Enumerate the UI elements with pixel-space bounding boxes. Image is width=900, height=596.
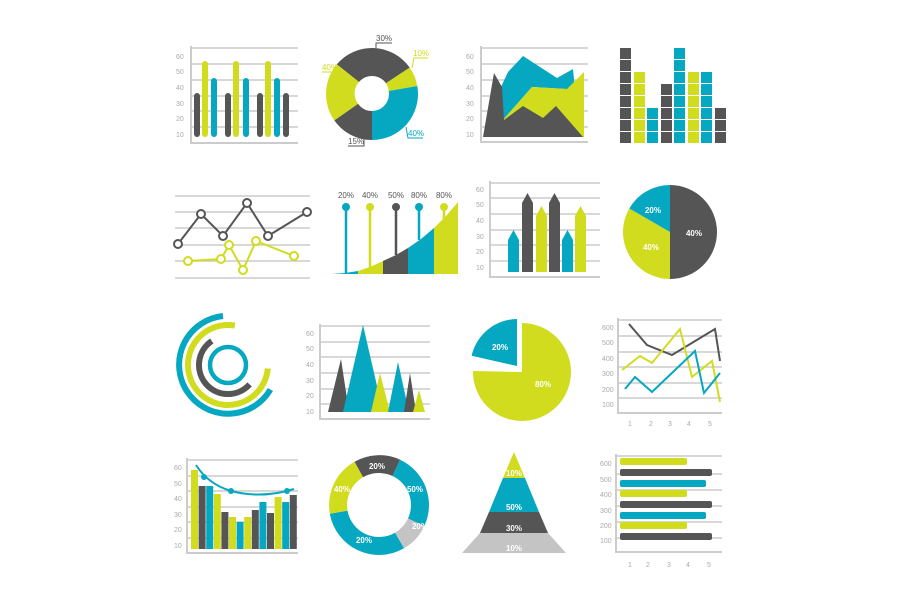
chart: horizontal bars: 3 [667,562,671,569]
chart: mountain peaks: 10 [306,409,314,416]
chart: multi-line chart: 600 [602,325,614,332]
chart: donut with inner labels [329,455,429,555]
chart: arrow bars [476,181,600,277]
chart: multi-line chart: 100 [602,402,614,409]
chart: area chart: 30 [466,101,474,108]
chart: horizontal bars: 100 [600,538,612,545]
chart: multi-line chart: 4 [687,421,691,428]
chart: line chart with circle markers [174,196,311,278]
chart: bars with trend curve: 20 [174,527,182,534]
chart: mountain peaks: 40 [306,362,314,369]
chart: mountain peaks: 20 [306,393,314,400]
chart: multi-line chart: 400 [602,356,614,363]
chart: arrow bars: 30 [476,234,484,241]
chart: growth curve with pins: 40% [362,191,378,200]
chart: arrow bars: 20 [476,249,484,256]
chart: bars with trend curve: 40 [174,496,182,503]
chart: horizontal bars: 400 [600,492,612,499]
chart: donut with inner labels: 20% [412,522,428,531]
chart: donut with callouts: 10% [413,49,429,58]
chart: bars with trend curve: 30 [174,512,182,519]
chart: donut with inner labels: 50% [407,485,423,494]
chart: bars with trend curve [174,458,298,553]
chart: multi-line chart: 3 [668,421,672,428]
chart: area chart: 40 [466,85,474,92]
chart: horizontal bars: 300 [600,508,612,515]
chart: donut with callouts: 30% [376,34,392,43]
chart: horizontal bars: 200 [600,523,612,530]
chart: area chart: 20 [466,116,474,123]
chart: mountain peaks: 50 [306,346,314,353]
chart: mountain peaks: 60 [306,331,314,338]
chart: multi-line chart: 5 [708,421,712,428]
chart: horizontal bars: 4 [686,562,690,569]
chart: pyramid: 10% [506,469,522,478]
chart: multi-line chart: 500 [602,340,614,347]
chart: arrow bars: 60 [476,187,484,194]
chart: multi-line chart: 2 [649,421,653,428]
chart: bars with trend curve: 60 [174,465,182,472]
chart: stacked block columns [620,48,726,143]
chart: horizontal bars: 2 [646,562,650,569]
chart: horizontal bars [600,454,722,569]
chart: horizontal bars: 5 [707,562,711,569]
chart: horizontal bars: 500 [600,477,612,484]
chart: growth curve with pins [332,191,458,274]
chart: pie 20/40/40 [623,185,717,279]
chart: arrow bars: 50 [476,202,484,209]
chart: donut with callouts [322,34,429,146]
chart: donut with callouts: 15% [348,137,364,146]
chart: exploded pie 20/80: 20% [492,343,508,352]
chart: arrow bars: 10 [476,265,484,272]
chart: grouped bar chart [176,46,298,143]
chart: exploded pie 20/80: 80% [535,380,551,389]
chart: grouped bar chart: 30 [176,101,184,108]
chart: bars with trend curve: 10 [174,543,182,550]
chart: area chart: 60 [466,54,474,61]
chart: concentric arcs [179,316,270,414]
chart: mountain peaks: 30 [306,378,314,385]
chart: horizontal bars: 1 [628,562,632,569]
chart: grouped bar chart: 60 [176,54,184,61]
chart: area chart: 10 [466,132,474,139]
chart: growth curve with pins: 80% [436,191,452,200]
chart: arrow bars: 40 [476,218,484,225]
chart: pie 20/40/40: 20% [645,206,661,215]
chart: grouped bar chart: 20 [176,116,184,123]
chart: donut with callouts: 40% [322,63,338,72]
chart: area chart [466,46,588,142]
chart: grouped bar chart: 10 [176,132,184,139]
chart: multi-line chart [602,318,722,428]
chart: area chart: 50 [466,69,474,76]
chart: grouped bar chart: 50 [176,69,184,76]
chart: pyramid: 30% [506,524,522,533]
chart: multi-line chart: 1 [628,421,632,428]
chart: donut with callouts: 40% [408,129,424,138]
chart: donut with inner labels: 20% [369,462,385,471]
chart: pyramid: 10% [506,544,522,553]
chart: donut with inner labels: 20% [356,536,372,545]
chart: bars with trend curve: 50 [174,481,182,488]
chart: grouped bar chart: 40 [176,85,184,92]
chart: multi-line chart: 200 [602,387,614,394]
chart: mountain peaks [306,324,430,419]
chart: pie 20/40/40: 40% [643,243,659,252]
chart: growth curve with pins: 20% [338,191,354,200]
chart: donut with inner labels: 40% [334,485,350,494]
chart: growth curve with pins: 80% [411,191,427,200]
chart: pyramid: 50% [506,503,522,512]
chart: multi-line chart: 300 [602,371,614,378]
chart: growth curve with pins: 50% [388,191,404,200]
chart: horizontal bars: 600 [600,461,612,468]
chart: pie 20/40/40: 40% [686,229,702,238]
chart: exploded pie 20/80 [472,319,571,421]
chart: pyramid [462,452,566,553]
